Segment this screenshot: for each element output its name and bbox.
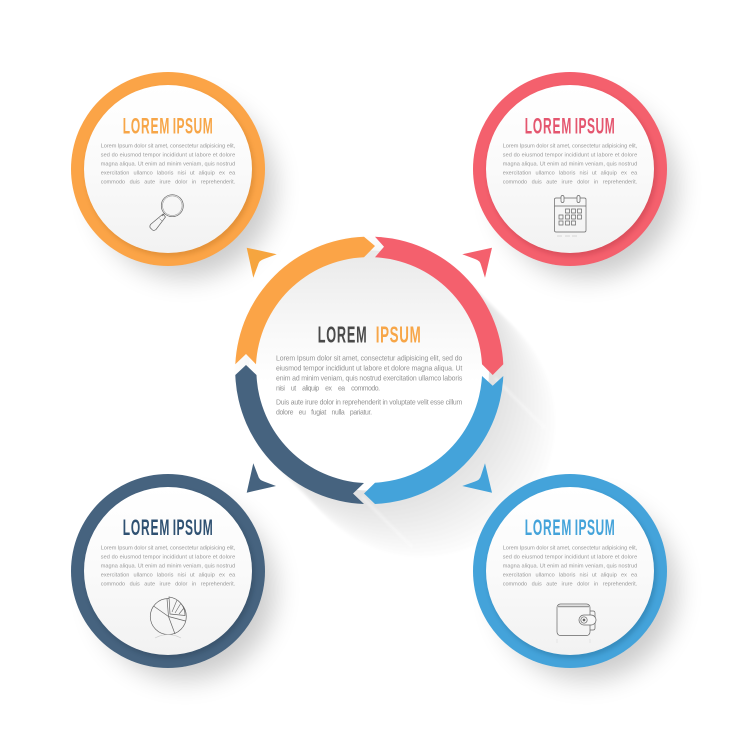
white face xyxy=(84,487,252,655)
icon: magnifying glass xyxy=(150,195,183,230)
body text: Lorem Ipsum dolor sit amet, consectetur adipisicing elit, xyxy=(101,546,236,552)
heading xyxy=(525,113,615,138)
icon: wallet xyxy=(557,604,596,643)
body text: commodo duis aute irure dolor in reprehenderit. xyxy=(503,179,638,185)
body text: magna aliqua. Ut enim ad minim veniam, quis nostrud xyxy=(101,564,235,570)
body text: exercitation ullamco laboris nisi ut aliquip ex ea xyxy=(503,170,638,176)
body text: exercitation ullamco laboris nisi ut aliquip ex ea xyxy=(503,573,638,579)
body text: magna aliqua. Ut enim ad minim veniam, quis nostrud xyxy=(503,161,637,167)
white face xyxy=(486,487,654,655)
central body text: dolore eu fugiat nulla pariatur. xyxy=(276,410,372,417)
body text: sed do eiusmod tempor incididunt ut labore et dolore xyxy=(503,152,637,158)
body text: sed do eiusmod tempor incididunt ut labore et dolore xyxy=(101,152,235,158)
body text: magna aliqua. Ut enim ad minim veniam, quis nostrud xyxy=(503,564,637,570)
ring xyxy=(473,474,667,668)
arrow: to navy circle xyxy=(247,463,276,493)
soft shadow xyxy=(497,98,677,278)
soft shadow xyxy=(95,500,275,680)
body text: commodo duis aute irure dolor in reprehenderit. xyxy=(101,582,236,588)
ring xyxy=(71,72,265,266)
heading: LOREM xyxy=(123,515,169,540)
white face xyxy=(84,85,252,253)
white face xyxy=(486,85,654,253)
heading xyxy=(525,515,615,540)
arrow: to red circle xyxy=(462,248,492,278)
body text xyxy=(101,143,236,185)
arrow segment: blue xyxy=(364,376,503,504)
heading: LOREM xyxy=(525,515,571,540)
icon: pie chart xyxy=(150,597,186,638)
body text: Lorem Ipsum dolor sit amet, consectetur adipisicing elit, xyxy=(503,143,638,149)
inner shadow xyxy=(86,490,254,658)
heading: LOREM xyxy=(525,113,571,138)
long shadow of central circle xyxy=(235,236,555,556)
central body text: Duis aute irure dolor in reprehenderit in voluptate velit esse cillum xyxy=(276,400,463,407)
heading: IPSUM xyxy=(173,113,213,138)
arrow segment: orange xyxy=(235,237,375,364)
central body text: Lorem Ipsum dolor sit amet, consectetur adipisicing elit, sed do xyxy=(276,355,462,362)
central body text: nisi ut aliquip ex ea commodo. xyxy=(276,385,380,392)
central body text: enim ad minim veniam, quis nostrud exercitation ullamco laboris xyxy=(276,375,463,382)
heading xyxy=(123,515,213,540)
arrow segment: navy xyxy=(235,365,364,504)
ring xyxy=(473,72,667,266)
body text: exercitation ullamco laboris nisi ut aliquip ex ea xyxy=(101,573,236,579)
body text: magna aliqua. Ut enim ad minim veniam, quis nostrud xyxy=(101,161,235,167)
panel: central circle xyxy=(235,237,503,504)
soft shadow xyxy=(95,98,275,278)
central heading xyxy=(318,321,421,347)
body text: exercitation ullamco laboris nisi ut aliquip ex ea xyxy=(101,170,236,176)
arrow segment: red xyxy=(375,237,503,375)
body text: commodo duis aute irure dolor in reprehenderit. xyxy=(101,179,236,185)
inner shadow xyxy=(86,88,254,256)
inner shadow xyxy=(488,88,656,256)
central circle face xyxy=(249,250,489,490)
icon: calendar xyxy=(554,196,586,236)
body text xyxy=(503,546,638,588)
panel: red circle xyxy=(473,72,677,278)
arrow: to orange circle xyxy=(247,248,277,278)
panel: blue circle xyxy=(473,474,677,680)
heading: IPSUM xyxy=(173,515,213,540)
arrow: to blue circle xyxy=(462,463,492,493)
ring xyxy=(71,474,265,668)
central body text: eiusmod tempor incididunt ut labore et dolore magna aliqua. Ut xyxy=(276,365,462,372)
central heading: IPSUM xyxy=(376,322,421,347)
panel: navy circle xyxy=(71,474,275,680)
inner shadow xyxy=(488,490,656,658)
central heading: LOREM xyxy=(318,321,367,347)
body text: commodo duis aute irure dolor in reprehenderit. xyxy=(503,582,638,588)
body text: Lorem Ipsum dolor sit amet, consectetur adipisicing elit, xyxy=(503,546,638,552)
heading: IPSUM xyxy=(575,113,615,138)
heading: IPSUM xyxy=(575,515,615,540)
soft shadow xyxy=(497,500,677,680)
body text: sed do eiusmod tempor incididunt ut labore et dolore xyxy=(503,555,637,561)
body text: sed do eiusmod tempor incididunt ut labore et dolore xyxy=(101,555,235,561)
central body text xyxy=(276,355,463,417)
heading: LOREM xyxy=(123,113,169,138)
body text xyxy=(503,143,638,185)
panel: orange circle xyxy=(71,72,275,278)
body text xyxy=(101,546,236,588)
heading xyxy=(123,113,213,138)
body text: Lorem Ipsum dolor sit amet, consectetur adipisicing elit, xyxy=(101,143,236,149)
